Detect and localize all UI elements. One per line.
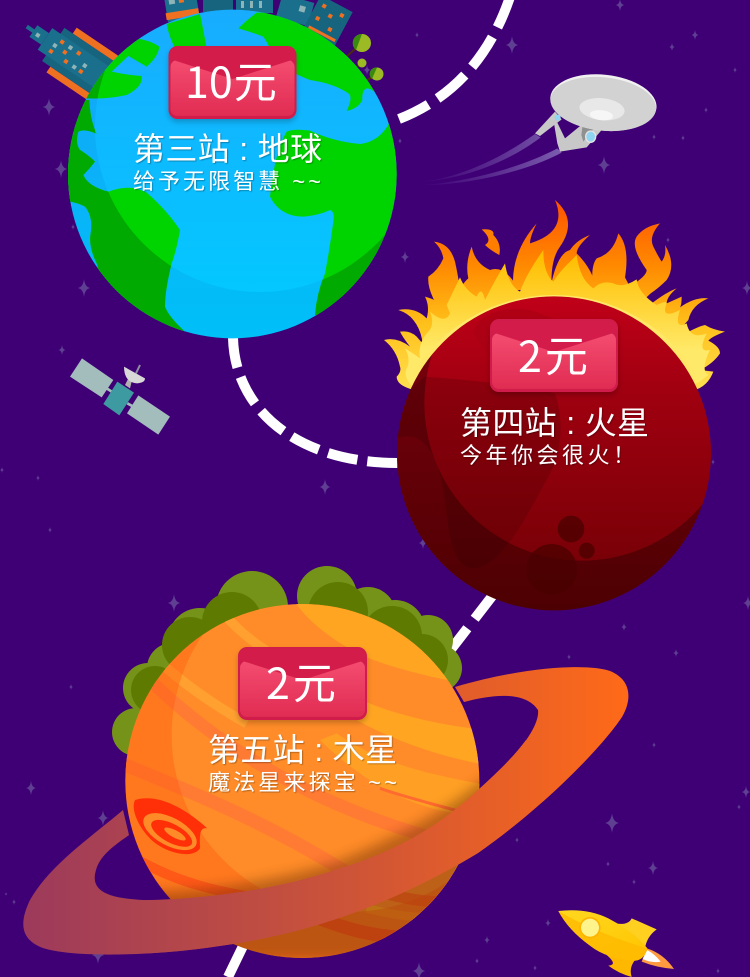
satellite dish (124, 365, 145, 388)
ocean shade crescent (70, 98, 322, 338)
planet: jupiter with ring (23, 558, 628, 977)
jupiter globe (125, 604, 480, 958)
jupiter left crescent (125, 634, 448, 958)
mars craters (527, 516, 595, 564)
earth globe (68, 10, 397, 338)
dashed route: jupiter to bottom (228, 944, 244, 977)
earth subtitle: 给予无限智慧 ~~ (133, 169, 321, 194)
rocket (558, 910, 674, 977)
ring: back (23, 667, 628, 955)
mars subtitle: 今年你会很火！ (460, 443, 635, 468)
satellite (70, 358, 170, 435)
rocket flame (642, 948, 674, 969)
rocket body (558, 910, 647, 961)
jupiter title: 第五站 : 木星 (208, 732, 397, 768)
red envelope: 10元 (168, 46, 296, 119)
red envelope: 2元 (jupiter) (238, 647, 367, 720)
planet: earth (26, 0, 397, 338)
rocket fins (607, 918, 657, 977)
buildings on earth (12, 0, 383, 100)
building cluster: left (12, 4, 118, 100)
ring: front (120, 740, 566, 954)
mars crescent shade (397, 354, 702, 610)
mars dark blob (393, 377, 561, 568)
satellite panel: right (127, 395, 170, 435)
mars top blob (476, 309, 552, 326)
dashed route: mars to jupiter (449, 595, 493, 652)
detached flame (482, 229, 500, 255)
red envelope: 2元 (mars) (490, 319, 618, 392)
jupiter red spot (134, 798, 207, 858)
ship saucer (547, 69, 659, 136)
dashed route: top to earth (399, 0, 511, 119)
mars title: 第四站 : 火星 (460, 405, 649, 441)
satellite connectors (107, 388, 133, 407)
flames (384, 200, 725, 389)
spaceship (420, 69, 659, 185)
ship trails (420, 134, 562, 185)
continents shaded edge (68, 70, 386, 332)
jupiter stripes (113, 610, 487, 938)
green cloud behind jupiter (112, 566, 462, 756)
flame pale rim (417, 300, 692, 377)
rocket window (579, 917, 601, 938)
continents (68, 12, 397, 332)
amount: 2元 (mars): 2元 (518, 323, 588, 385)
satellite panel: left (70, 358, 113, 397)
rocket belly shade (558, 911, 647, 961)
ship nacelles (555, 115, 597, 142)
amount: 10元: 10元 (185, 49, 277, 111)
inner flames (405, 250, 710, 387)
jupiter subtitle: 魔法星来探宝 ~~ (208, 770, 397, 795)
mars globe (397, 296, 711, 610)
satellite body (103, 382, 134, 415)
dashed route: earth to mars (233, 338, 398, 463)
building cluster: top (162, 0, 353, 46)
ring shadow on jupiter (160, 774, 479, 958)
earth title: 第三站 : 地球 (133, 131, 322, 167)
ship hull (535, 112, 602, 152)
planet: mars (380, 200, 747, 623)
amount: 2元 (jupiter): 2元 (266, 650, 336, 712)
trees (346, 34, 384, 82)
jupiter top highlight (296, 604, 448, 680)
